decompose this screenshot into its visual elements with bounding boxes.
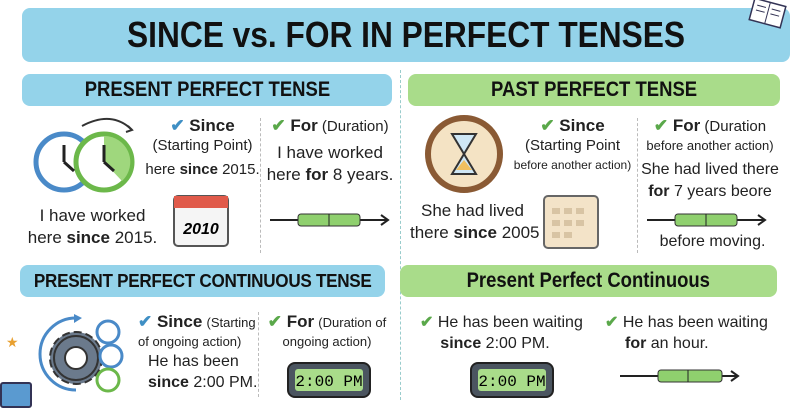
timeline [620,370,740,382]
divider [258,312,259,397]
text: for: I have worked [277,143,383,162]
icon: digital clock: 2:00 PM [295,373,363,391]
heading [400,265,777,297]
text: since [138,312,257,391]
text: since example [420,314,583,352]
text: since example: ✔ He has been waiting [420,314,583,331]
text: since example [28,206,157,247]
text: since label: (Starting Point [525,137,620,154]
text: since example: there since 2005 [410,223,540,242]
text: for: ✔ For (Duration [654,116,766,135]
panel: past perfect [408,74,780,253]
heading: Present Perfect Continuous [467,269,710,292]
text: since label [145,116,260,178]
icon: clocks [34,118,134,192]
text: since label: ✔ Since [170,116,235,135]
text: since label: before another action) [514,158,631,172]
icon: digital clock [470,362,554,398]
text: since: He has been [148,353,239,370]
icon: clock hourglass [425,115,503,193]
divider [637,118,638,253]
text: since label [514,116,631,172]
heading: PRESENT PERFECT CONTINUOUS TENSE [34,271,371,291]
vertical divider [400,70,401,400]
text: since example: since 2:00 PM. [440,335,550,352]
icon: digital clock: 2:00 PM [478,373,546,391]
text: for: ✔ For (Duration) [271,116,389,135]
text: for: for 7 years beore [648,183,772,200]
heading [20,265,385,297]
heading: past perfect [408,74,780,106]
text: for [641,116,779,200]
heading: present perfect: PRESENT PERFECT TENSE [84,78,330,101]
heading: past perfect: PAST PERFECT TENSE [491,78,697,101]
icon: gear with clocks [38,314,124,392]
text: for: before another action) [646,138,774,153]
text: for [267,116,393,184]
text: for example: ✔ He has been waiting [605,314,768,331]
divider [260,118,261,253]
text: since example [410,201,540,242]
text: before moving: before moving. [660,233,765,250]
text: since label: ✔ Since [540,116,605,135]
timeline [647,214,767,226]
text: since example: I have worked [40,206,145,225]
icon: calendar: 2010 [182,221,219,238]
text: since example: She had lived [421,201,524,220]
text: since label: (Starting Point) [152,137,253,154]
icon: calendar [543,195,599,249]
text: for: ✔ For (Duration of [268,312,386,331]
text: since: since 2:00 PM. [148,374,257,391]
text: since example: here since 2015. [28,228,157,247]
text: since: ✔ Since (Starting [138,312,256,331]
title bar [22,8,790,62]
text: since: of ongoing action) [138,334,241,349]
panel: present perfect continuous [20,265,386,398]
title bar: SINCE vs. FOR IN PERFECT TENSES [127,14,685,55]
icon: book [748,0,787,29]
text: for: She had lived there [641,161,779,178]
icon: digital clock [287,362,371,398]
panel: present perfect [22,74,393,253]
panel: present perfect continuous green [400,265,777,398]
text: for example: for an hour. [625,335,709,352]
text: since label: here since 2015. [145,161,260,178]
heading: present perfect [22,74,392,106]
text: for example [605,314,768,352]
text: for: ongoing action) [283,334,371,349]
icon: notebook [0,382,32,408]
text: for: here for 8 years. [267,165,393,184]
timeline [270,214,390,226]
text: for [268,312,386,349]
icon: calendar [173,195,229,247]
icon: star: ★ [6,334,19,350]
